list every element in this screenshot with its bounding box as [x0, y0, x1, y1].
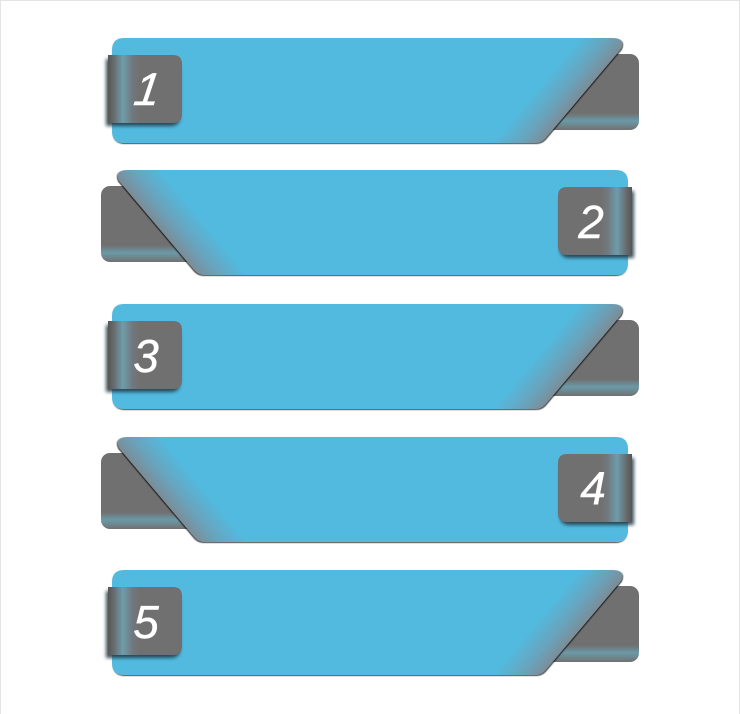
number 1: 1 — [131, 63, 164, 115]
number 2: 2 — [577, 196, 604, 248]
number 4: 4 — [580, 462, 606, 514]
blue ribbon — [118, 437, 628, 542]
folded tail — [101, 186, 210, 262]
number tab — [108, 587, 182, 655]
banner 3 — [106, 304, 639, 409]
banner 5 — [106, 570, 639, 675]
tab shadow — [106, 591, 180, 658]
blue ribbon — [112, 570, 622, 675]
banner 1 — [106, 38, 639, 143]
banner 4 — [101, 437, 634, 542]
tab shadow — [560, 191, 634, 258]
number tab — [108, 321, 182, 389]
folded tail — [530, 320, 639, 396]
number 5: 5 — [133, 596, 159, 648]
number 3: 3 — [133, 330, 159, 382]
folded tail — [530, 54, 639, 130]
tab shadow — [106, 59, 180, 126]
blue ribbon — [112, 38, 622, 143]
banner 2 — [101, 170, 634, 275]
folded tail — [101, 453, 210, 529]
number tab — [558, 187, 632, 255]
tab shadow — [560, 458, 634, 525]
number tab — [558, 454, 632, 522]
blue ribbon — [118, 170, 628, 275]
folded tail — [530, 586, 639, 662]
tab shadow — [106, 325, 180, 392]
number tab — [108, 55, 182, 123]
blue ribbon — [112, 304, 622, 409]
